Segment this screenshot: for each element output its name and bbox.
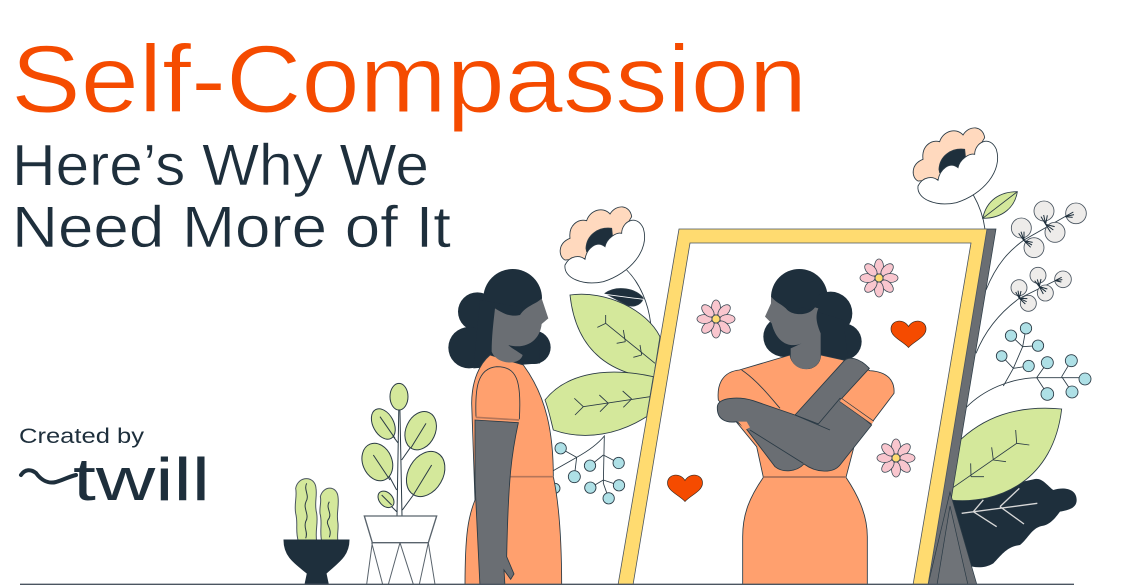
subtitle <box>12 133 451 260</box>
blossom branch 1 <box>986 201 1086 290</box>
flower <box>560 207 645 283</box>
upper green leaf <box>570 294 660 379</box>
credit: created by twill <box>19 424 210 513</box>
mirror <box>618 229 996 585</box>
mirror side edge <box>928 229 996 585</box>
sleeve <box>476 367 520 419</box>
twill logo wordmark: twill <box>73 446 210 513</box>
mirror glass <box>633 243 971 585</box>
top flower <box>913 128 998 204</box>
blue berry branch <box>550 436 625 504</box>
leaf veins <box>373 417 432 505</box>
floor line <box>20 583 1074 585</box>
pink flower 3 <box>877 439 915 477</box>
potted plant <box>356 383 453 584</box>
lower green leaf <box>545 372 653 435</box>
credit label: Created by <box>19 424 144 448</box>
heart lower <box>668 475 702 502</box>
arm <box>475 420 518 585</box>
subtitle: Here’s Why We <box>12 133 429 198</box>
small leaf <box>983 192 1017 218</box>
sleeve band <box>476 417 519 420</box>
flower stem <box>627 270 651 323</box>
pink flower 2 <box>860 259 898 297</box>
title: Self-Compassion <box>11 26 807 133</box>
face and neck <box>492 298 548 363</box>
sleeve band <box>841 400 873 423</box>
hearts <box>668 321 926 502</box>
plant leaves <box>356 383 453 511</box>
mirror frame <box>618 229 987 585</box>
subtitle: Need More of It <box>12 195 451 260</box>
blue berry branch <box>966 323 1091 408</box>
plant stems <box>383 397 413 516</box>
blossom branch 2 <box>976 267 1071 353</box>
pink flower 1 <box>697 300 735 338</box>
plants behind mirror, right side <box>950 192 1091 567</box>
dark pot <box>284 540 349 584</box>
reflection: woman hugging herself <box>717 269 894 585</box>
plants behind mirror, left side <box>545 207 660 504</box>
crossed arm, rear <box>795 358 869 424</box>
cactus pot <box>284 479 349 584</box>
waistband <box>763 474 846 480</box>
neck and face <box>765 297 821 369</box>
hand tip <box>738 422 750 430</box>
dress <box>465 355 562 585</box>
bodice <box>718 355 894 477</box>
large green leaf <box>950 408 1062 501</box>
twill logo squiggle <box>21 470 76 483</box>
crossed arm, front <box>717 398 872 471</box>
woman standing at mirror <box>448 269 562 585</box>
top flower stem <box>973 195 985 229</box>
dark leaf <box>605 289 643 306</box>
dark leaf <box>950 479 1077 567</box>
arm details <box>742 370 830 463</box>
skirt <box>743 477 867 585</box>
waist seam <box>509 474 553 479</box>
pink flowers <box>697 259 915 477</box>
hair <box>763 269 862 362</box>
white planter <box>364 516 437 543</box>
mirror stand <box>928 492 977 585</box>
planter legs <box>367 543 435 584</box>
cactus stems <box>295 479 338 541</box>
heart upper <box>891 321 926 348</box>
hair <box>448 269 551 368</box>
